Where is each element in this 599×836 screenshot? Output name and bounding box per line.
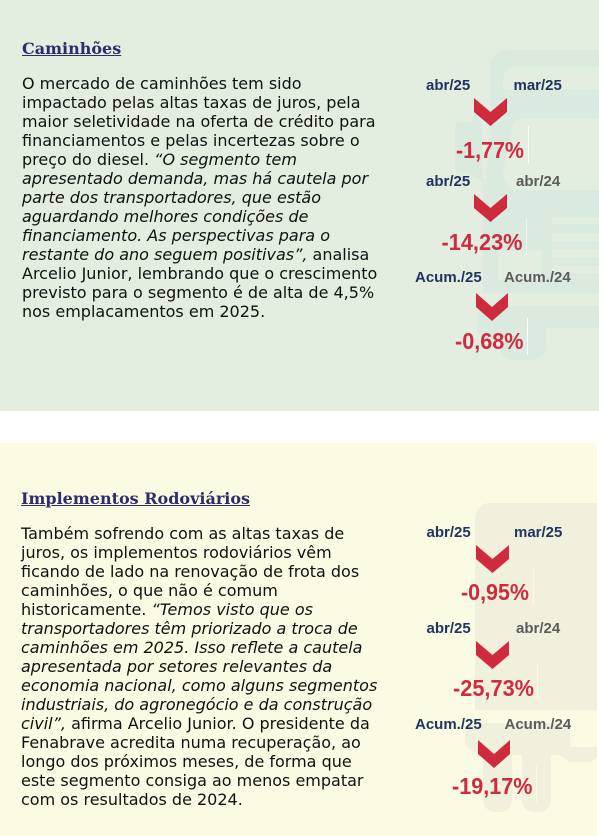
text block: Implementos Rodoviários: este segmento consiga ao menos empatar — [21, 771, 364, 790]
stat: Acum./25 vs Acum./24: Acum./24 — [504, 269, 571, 286]
stat: abr/25 vs abr/24: abr/25 — [426, 173, 470, 190]
text block: Caminhões: restante do ano seguem positivas”, analisa — [22, 245, 369, 264]
stat: abr/25 vs mar/25: mar/25 — [514, 77, 562, 94]
text block: Caminhões: maior seletividade na oferta de crédito para — [22, 112, 376, 131]
heading: Implementos Rodoviários: Implementos Rodoviários — [21, 489, 250, 508]
text block: Implementos Rodoviários: industriais, do agronegócio e da construção — [21, 695, 372, 714]
text block: Caminhões: impactado pelas altas taxas de juros, pela — [22, 93, 361, 112]
stat: abr/25 vs mar/25 — [426, 77, 562, 163]
stat: abr/25 vs abr/24 — [426, 173, 561, 255]
text block: Caminhões: O mercado de caminhões tem sido — [22, 74, 302, 93]
icon: down chevron — [476, 293, 508, 321]
stat: abr/25 vs mar/25: mar/25 — [514, 524, 562, 541]
text block: Implementos Rodoviários: longo dos próximos meses, de forma que — [21, 752, 352, 771]
text block: Implementos Rodoviários: economia nacional, como alguns segmentos — [21, 676, 377, 695]
stat: abr/25 vs mar/25: abr/25 — [426, 77, 470, 94]
icon: down chevron — [474, 194, 507, 222]
text block: Caminhões: financiamentos e pelas incertezas sobre o — [22, 131, 360, 150]
text block: Caminhões: financiamento. As perspectivas para o — [22, 226, 330, 245]
text block: Implementos Rodoviários: juros, os implementos rodoviários vêm — [21, 543, 332, 562]
chart: Caminhões variation indicators — [415, 77, 571, 355]
text block: Caminhões: previsto para o segmento é de alta de 4,5% — [22, 283, 374, 302]
stat: abr/25 vs abr/24: -25,73% — [453, 675, 534, 701]
text block: Caminhões: Arcelio Junior, lembrando que o crescimento — [22, 264, 377, 283]
stat: Acum./25 vs Acum./24: Acum./24 — [504, 716, 572, 733]
stat: abr/25 vs mar/25: abr/25 — [426, 524, 471, 541]
stat: Acum./25 vs Acum./24: Acum./25 — [415, 716, 482, 733]
stat: abr/25 vs abr/24: abr/25 — [426, 620, 471, 637]
text block: Caminhões: apresentado demanda, mas há cautela por — [22, 169, 368, 188]
stat: Acum./25 vs Acum./24: Acum./25 — [415, 269, 482, 286]
text block: Implementos Rodoviários: apresentada por setores relevantes da — [21, 657, 332, 676]
stat: abr/25 vs abr/24: -14,23% — [442, 229, 522, 255]
text block: Implementos Rodoviários: ficando de lado na renovação de frota dos — [21, 562, 359, 581]
stat: abr/25 vs mar/25: -1,77% — [456, 137, 524, 163]
text block: Caminhões: nos emplacamentos em 2025. — [22, 302, 265, 321]
decorative truck watermark — [455, 50, 599, 360]
stat: Acum./25 vs Acum./24: -0,68% — [455, 328, 524, 354]
icon: down chevron — [476, 641, 509, 669]
text block: Implementos Rodoviários: com os resultados de 2024. — [21, 790, 243, 809]
text block: Caminhões — [22, 74, 377, 321]
stat: abr/25 vs abr/24 — [426, 620, 561, 701]
text block: Implementos Rodoviários: civil”, afirma Arcelio Junior. O presidente da — [21, 714, 370, 733]
text block: Implementos Rodoviários: Fenabrave acredita numa recuperação, ao — [21, 733, 361, 752]
text block: Implementos Rodoviários: transportadores têm priorizado a troca de — [21, 619, 358, 638]
stat: abr/25 vs abr/24: abr/24 — [516, 173, 561, 190]
text block: Caminhões: preço do diesel. “O segmento tem — [22, 150, 297, 169]
chart: Implementos variation indicators — [415, 503, 597, 812]
heading: Caminhões: Caminhões — [22, 39, 121, 58]
stat: abr/25 vs abr/24: abr/24 — [516, 620, 561, 637]
decorative trailer watermark — [465, 503, 597, 812]
text block: Implementos Rodoviários: caminhões em 2025. Isso reflete a cautela — [21, 638, 362, 657]
stat: Acum./25 vs Acum./24: -19,17% — [452, 773, 532, 799]
stat: abr/25 vs mar/25: -0,95% — [461, 579, 529, 605]
stat: Acum./25 vs Acum./24 — [415, 269, 571, 354]
text block: Implementos Rodoviários — [20, 524, 377, 809]
stat: Acum./25 vs Acum./24 — [415, 716, 572, 799]
stat: abr/25 vs mar/25 — [426, 524, 562, 605]
icon: down chevron — [478, 740, 510, 768]
text block: Caminhões: parte dos transportadores, que estão — [22, 188, 321, 207]
panel: Caminhões — [0, 0, 599, 411]
decorative lines — [533, 568, 538, 802]
text block: Implementos Rodoviários: Também sofrendo com as altas taxas de — [21, 524, 344, 543]
panel: Implementos Rodoviários — [0, 443, 597, 836]
icon: down chevron — [474, 98, 507, 126]
icon: down chevron — [476, 545, 509, 573]
text block: Implementos Rodoviários: caminhões, o que não é comum — [21, 581, 278, 600]
text block: Implementos Rodoviários: historicamente. “Temos visto que os — [21, 600, 313, 619]
text block: Caminhões: aguardando melhores condições de — [22, 207, 308, 226]
decorative white lines — [526, 126, 529, 355]
